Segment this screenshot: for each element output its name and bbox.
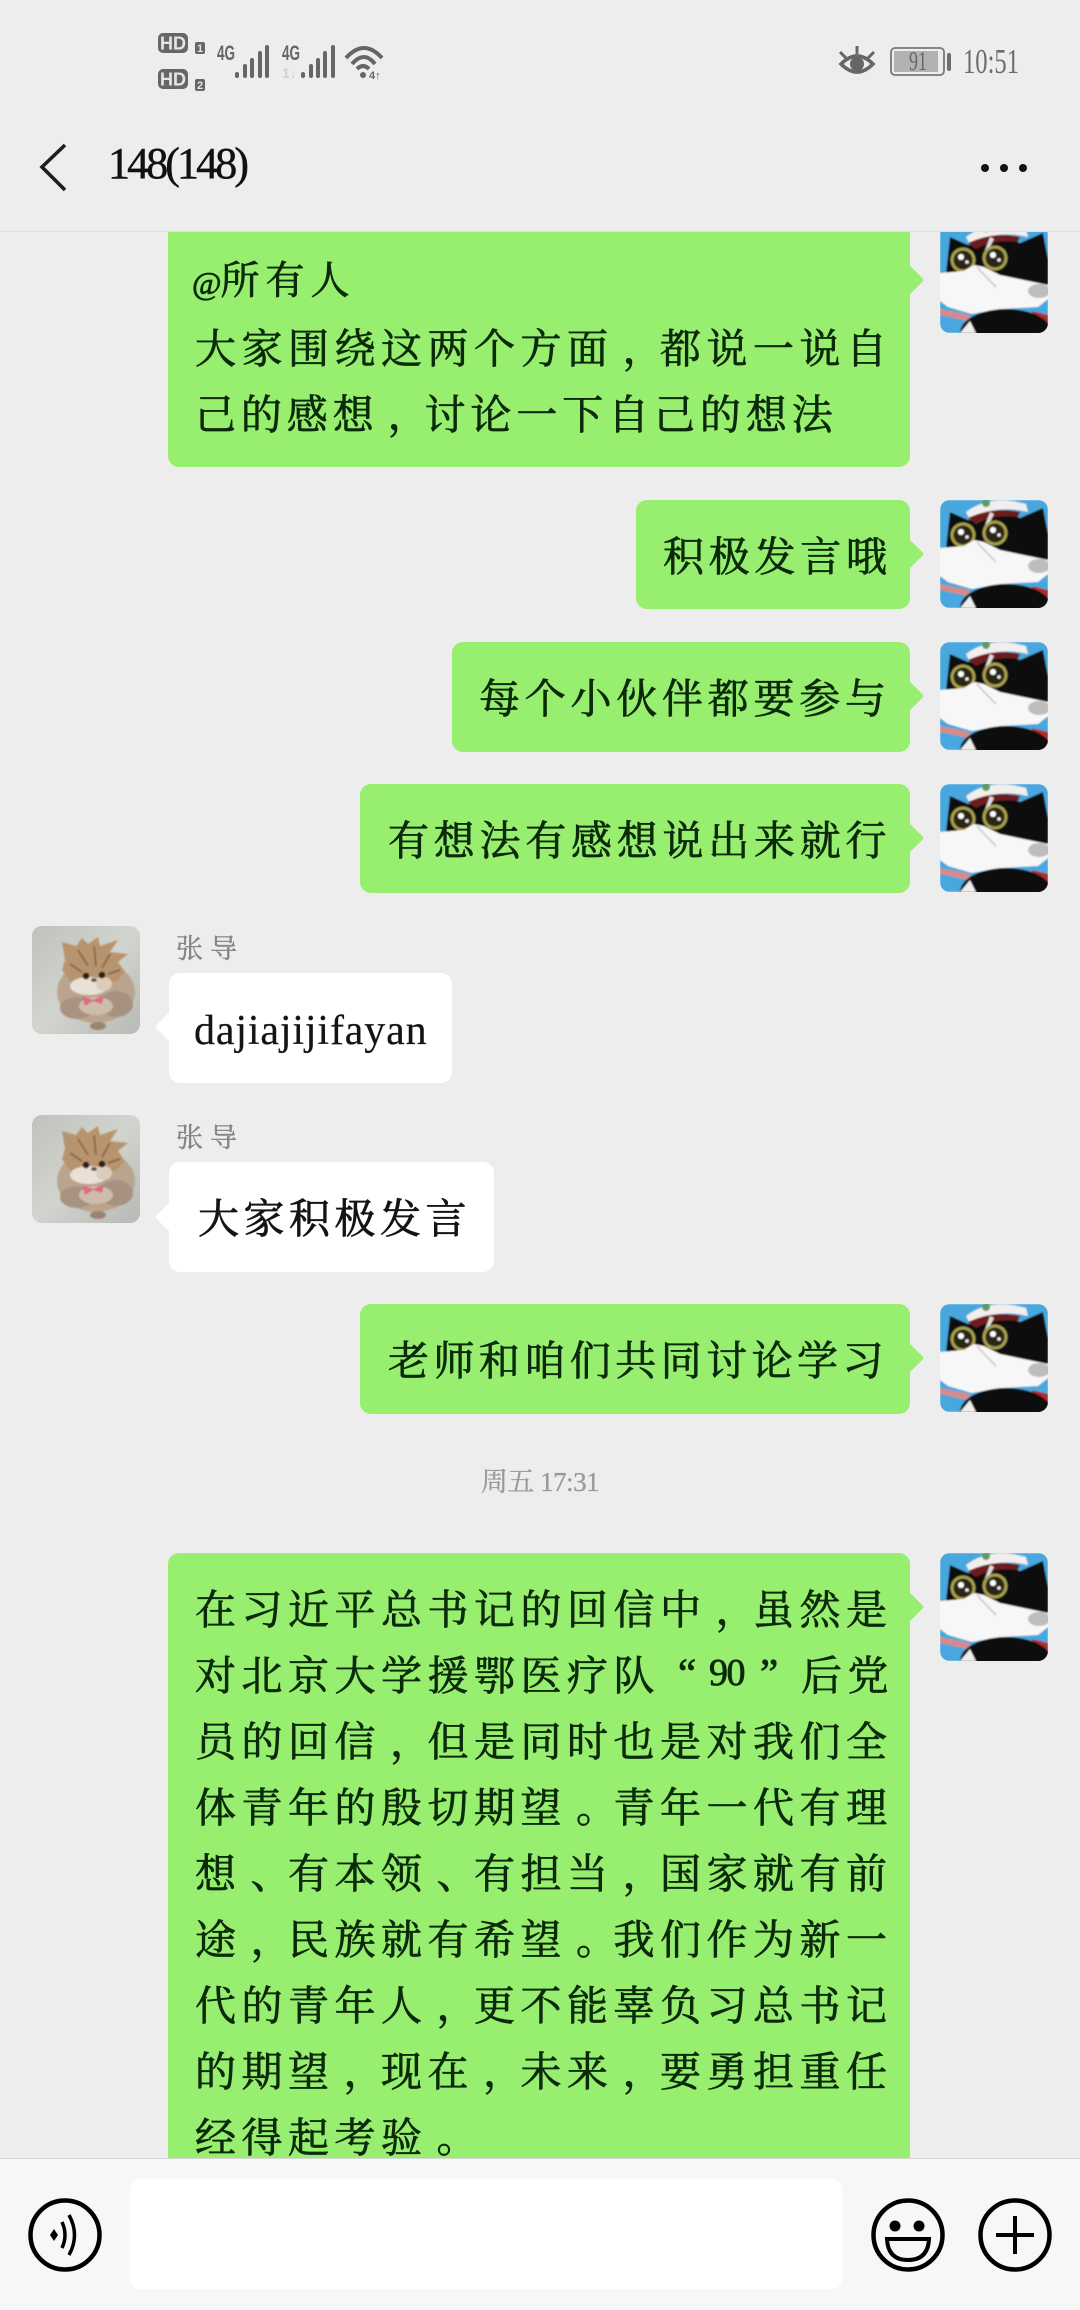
icon: back chevron [40, 144, 66, 192]
icon: cat avatar [940, 1553, 1048, 1661]
bubble tail [896, 1593, 924, 1621]
message text: 老师和咱们共同讨论学习 [388, 1328, 888, 1387]
status bar right icons: 91 [909, 46, 927, 76]
message text: 每个小伙伴都要参与 [479, 666, 891, 725]
icon: cat avatar cropped [940, 232, 1048, 333]
message line 1: 大家围绕这两个方面，都说一说自 [195, 316, 892, 375]
icon: more menu dots [981, 164, 1027, 172]
icon: cat avatar [940, 500, 1048, 608]
bubble tail [896, 824, 924, 852]
sender name: 张导 [176, 1116, 244, 1155]
panel: message 每个小伙伴都要参与 [452, 642, 910, 752]
status bar left icons: 4G [217, 42, 235, 65]
message text: dajiajijifayan [194, 1008, 427, 1054]
text line 6: 途，民族就有希望。我们作为新一 [195, 1907, 892, 1966]
bubble tail [896, 266, 924, 294]
panel: input bar [0, 2158, 1080, 2310]
text line 7: 代的青年人，更不能辜负习总书记 [195, 1973, 892, 2032]
icon: voice [28, 2198, 102, 2272]
icon: fluffy cat avatar [32, 1115, 140, 1223]
timestamp: 周五 17:31 [481, 1467, 599, 1497]
panel: header bar [0, 0, 1080, 232]
message text: 有想法有感想说出来就行 [388, 808, 891, 867]
text line 1: 在习近平总书记的回信中，虽然是 [195, 1577, 892, 1636]
message text: 积极发言哦 [663, 524, 892, 583]
text line 3: 员的回信，但是同时也是对我们全 [195, 1709, 892, 1768]
status bar left icons: 1↓ [282, 65, 297, 81]
bubble tail [896, 540, 924, 568]
status bar right icons [838, 42, 1019, 81]
icon: cat avatar [940, 784, 1048, 892]
sender name: 张导 [176, 927, 244, 966]
text line 2: “ [678, 1650, 702, 1696]
message line 2: 己的感想，讨论一下自己的想法 [195, 382, 838, 441]
panel: message dajiajijifayan [169, 973, 452, 1083]
bubble tail [155, 1013, 183, 1041]
text line 9: 经得起考验。 [195, 2105, 483, 2164]
icon: plus [978, 2198, 1052, 2272]
text input box [130, 2179, 842, 2289]
icon: fluffy cat avatar [32, 926, 140, 1034]
status bar left icons: 4G [282, 42, 300, 65]
panel: long message bubble [168, 1553, 910, 2158]
bubble tail [896, 682, 924, 710]
panel: message 积极发言哦 [636, 500, 910, 609]
text line 4: 体青年的殷切期望。青年一代有理 [195, 1775, 892, 1834]
icon: cat avatar [940, 642, 1048, 750]
message text: 大家积极发言 [198, 1186, 471, 1245]
status bar left icons: HD [160, 70, 186, 90]
status bar left icons: 1 [197, 43, 203, 55]
panel: message 大家积极发言 [169, 1162, 494, 1272]
chat title: 148(148) [108, 139, 246, 188]
status bar left icons [158, 33, 384, 92]
text line 2: 后党 [801, 1643, 894, 1702]
status bar left icons: HD [160, 34, 186, 54]
text line 2: 90 [709, 1652, 744, 1694]
bubble tail [155, 1203, 183, 1231]
text line 8: 的期望，现在，未来，要勇担重任 [195, 2039, 892, 2098]
status bar left icons: 2 [197, 80, 203, 92]
text line 5: 想、有本领、有担当，国家就有前 [195, 1841, 892, 1900]
bubble tail [896, 1344, 924, 1372]
panel: chat message bubble with mention [168, 232, 910, 467]
mention text: @所有人 [192, 260, 355, 303]
text line 2: 对北京大学援鄂医疗队 [195, 1643, 660, 1702]
text line 2 [195, 1643, 894, 1702]
icon: emoji [871, 2198, 945, 2272]
icon: cat avatar [940, 1304, 1048, 1412]
panel: message 有想法有感想说出来就行 [360, 784, 910, 893]
panel: message 老师和咱们共同讨论学习 [360, 1304, 910, 1414]
status bar left icons: 4↑ [369, 70, 381, 82]
text line 2: ” [760, 1650, 784, 1696]
